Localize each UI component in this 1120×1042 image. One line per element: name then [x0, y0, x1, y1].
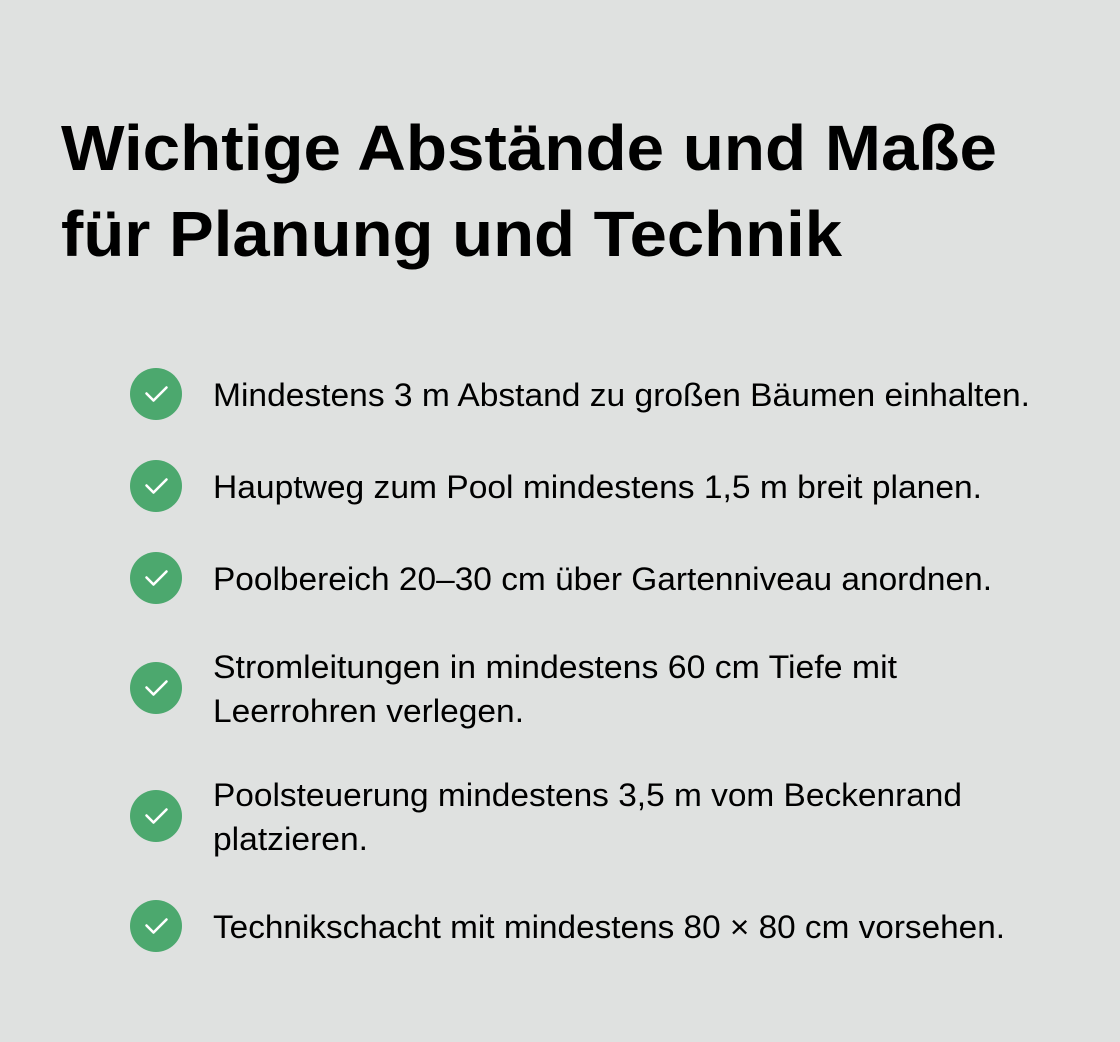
icon: check 3	[130, 552, 182, 604]
text: item 5: platzieren.	[213, 821, 368, 857]
list item 1	[130, 368, 1030, 420]
title: Wichtige Abstände und Maße	[61, 112, 997, 184]
list item 2	[130, 460, 982, 512]
text: item 4: Stromleitungen in mindestens 60 cm Tiefe mit	[213, 649, 897, 685]
text: item 3: Poolbereich 20–30 cm über Gartenniveau anordnen.	[213, 561, 992, 597]
list item 5	[130, 777, 962, 857]
icon: check 1	[130, 368, 182, 420]
icon: check 2	[130, 460, 182, 512]
list item 3	[130, 552, 992, 604]
text: item 1: Mindestens 3 m Abstand zu großen Bäumen einhalten.	[213, 377, 1030, 413]
title: für Planung und Technik	[61, 198, 842, 270]
icon: check 4	[130, 662, 182, 714]
list item 4	[130, 649, 897, 729]
title	[61, 112, 997, 270]
icon: check 5	[130, 790, 182, 842]
list item 6	[130, 900, 1005, 952]
text: item 4	[213, 649, 897, 729]
text: item 2: Hauptweg zum Pool mindestens 1,5 m breit planen.	[213, 469, 982, 505]
text: item 5: Poolsteuerung mindestens 3,5 m vom Beckenrand	[213, 777, 962, 813]
icon: check 6	[130, 900, 182, 952]
text: item 4: Leerrohren verlegen.	[213, 693, 524, 729]
text: item 6: Technikschacht mit mindestens 80 × 80 cm vorsehen.	[213, 909, 1005, 945]
text: item 5	[213, 777, 962, 857]
